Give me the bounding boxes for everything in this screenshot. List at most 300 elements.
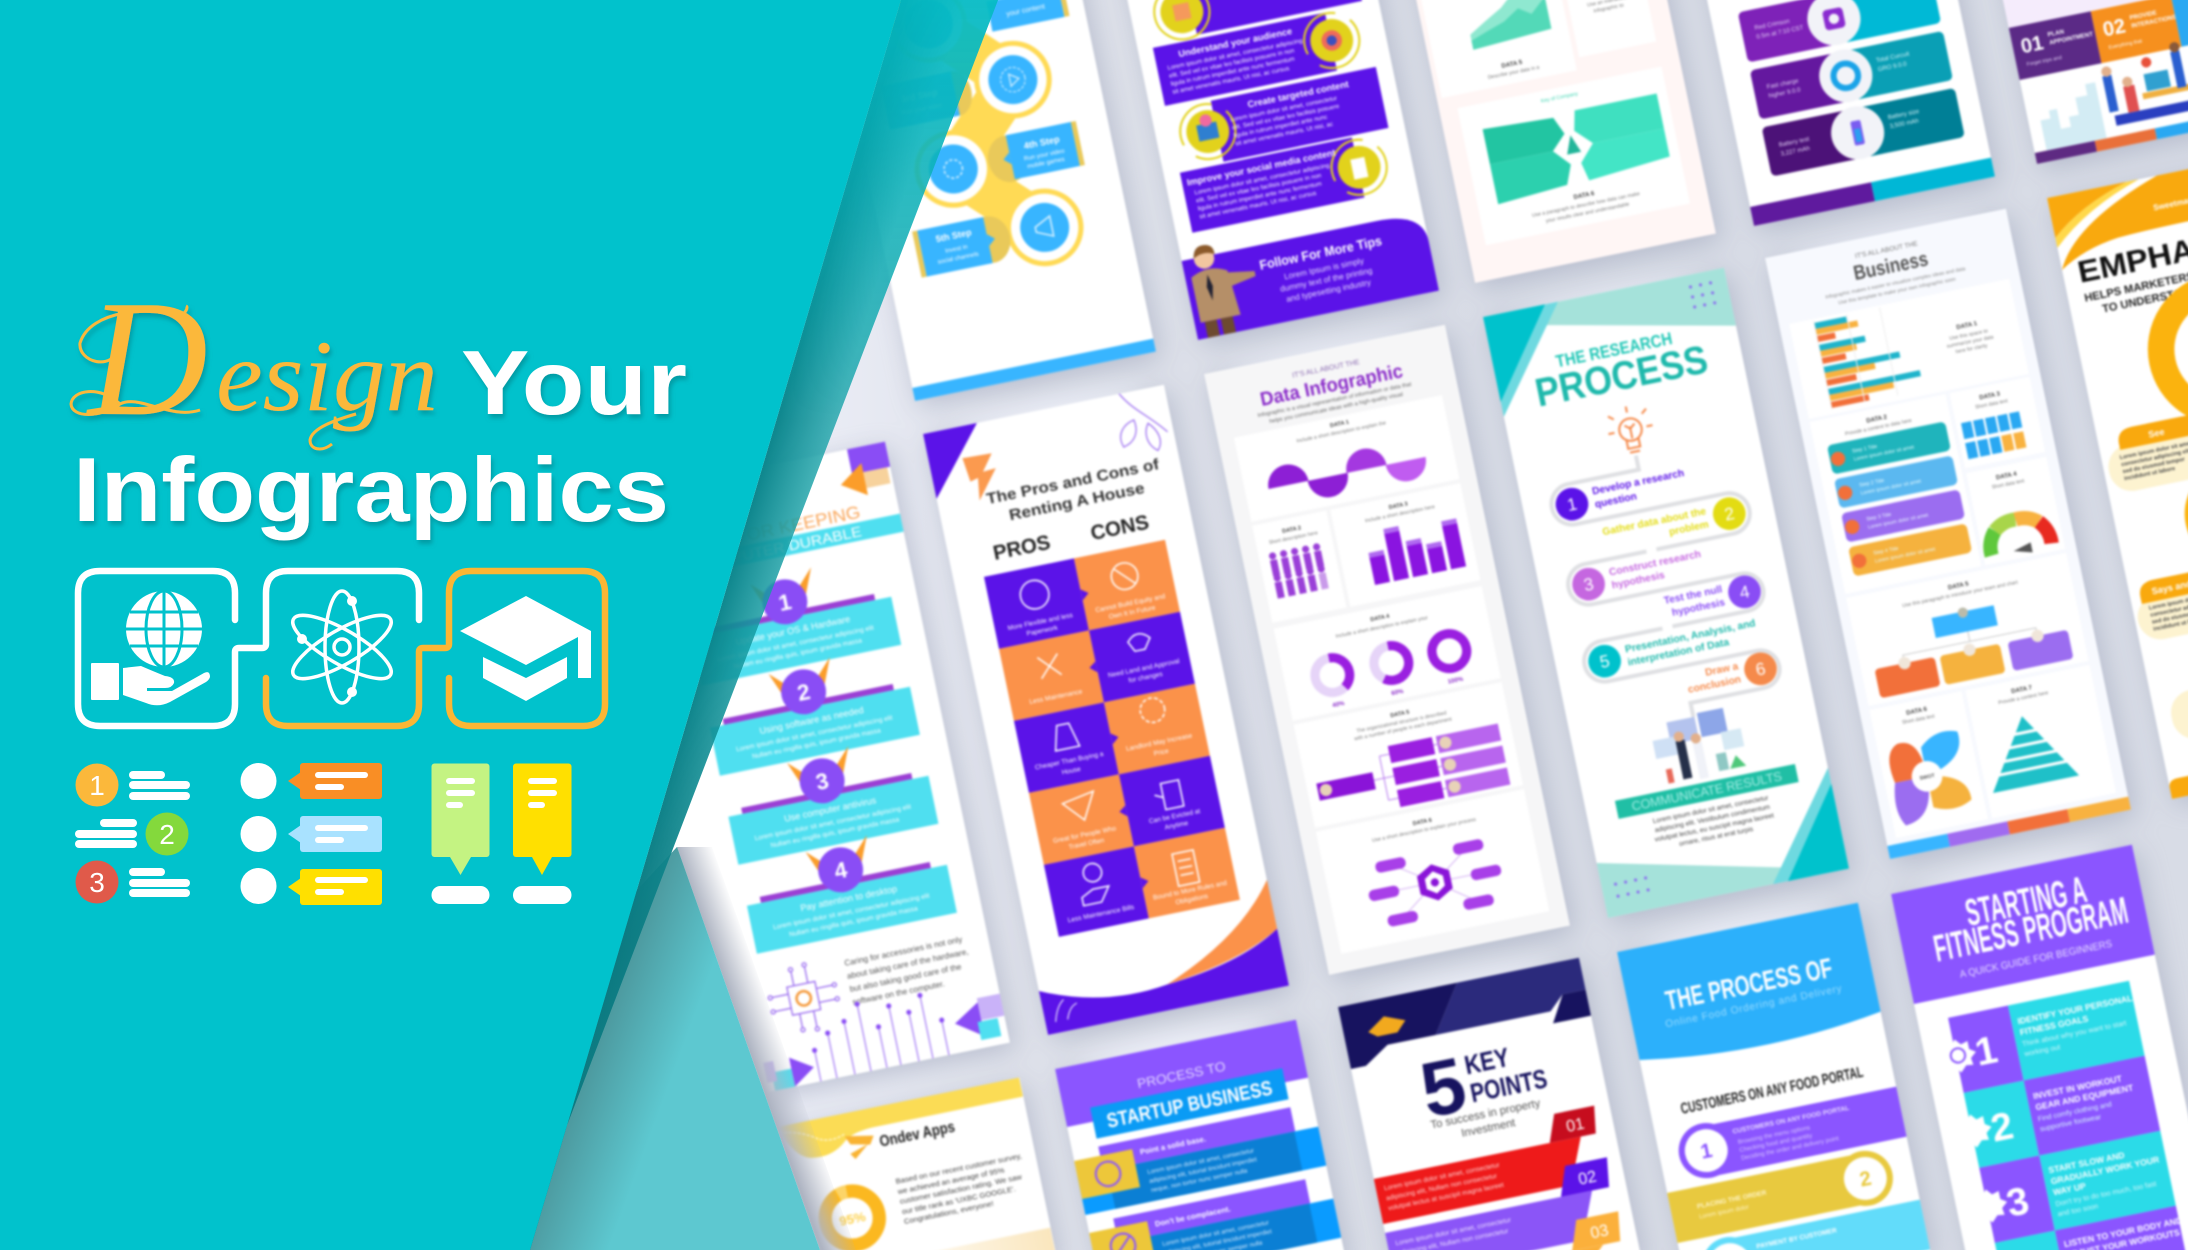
header [1338, 958, 1592, 1069]
block 01: 01 [2019, 32, 2046, 58]
panel: data 4 donuts: 60% [1391, 688, 1405, 697]
step 2: Lorem ipsum dolor [1699, 1204, 1750, 1221]
panel: data 2 cards: Step 3 Title [1866, 512, 1892, 523]
panel: bar chart [1789, 279, 2029, 419]
logo [845, 1134, 875, 1160]
step 1: Nullam eu ringilla quis, ipsum gravida massa [733, 637, 863, 671]
step 5 [1585, 614, 1760, 680]
pros and cons grid: Anytime [1164, 820, 1189, 832]
collage of tilted infographic cards [574, 0, 2188, 1250]
paragraph [1650, 794, 1777, 853]
card: process to startup business [1055, 1020, 1345, 1250]
step 5: 5 [1598, 651, 1611, 672]
pros and cons grid: Travel Often [1068, 837, 1105, 851]
panel: data 2 cards: Lorem ipsum dolor sit amet [1860, 478, 1922, 497]
step 4: Lorem ipsum dolor sit amet, consectetur adipiscing elit [773, 892, 930, 931]
heading: key points [1462, 1035, 1550, 1108]
label: 4th step: mobile games [1027, 156, 1065, 170]
step 1 [1553, 465, 1689, 523]
connecting yellow shape [923, 9, 1045, 243]
panel: data 5 org tree: DATA 5 [1390, 710, 1410, 719]
step 1: Develop a research [1591, 468, 1685, 498]
grid: step rows [1933, 980, 2188, 1250]
pros and cons grid: Need Land and Approval [1107, 658, 1181, 679]
step 3: Use computer antivirus [783, 795, 877, 824]
item: point a solid base: adipiscing elit, tutorial tincidunt imperdiet [1149, 1156, 1258, 1185]
header: PROCESS TO [1136, 1059, 1227, 1091]
grid: step rows: LISTEN TO YOUR BODY AND [2063, 1215, 2183, 1249]
step 2: problem [1668, 519, 1710, 538]
title line 1: STARTING A [1962, 869, 2090, 935]
card: ondev apps [778, 1078, 1056, 1250]
panel: data 6 hub: DATA 6 [1412, 818, 1432, 827]
step 3: Lorem ipsum dolor sit amet, consectetur adipiscing elit [754, 803, 912, 842]
section: see: sed do eiusmod tempor [2122, 457, 2186, 475]
card: business data [1765, 209, 2131, 859]
step 1: Checking food and quantity [1739, 1132, 1814, 1154]
donut: 95% [820, 1186, 884, 1250]
title: IT'S ALL ABOUT THE [1292, 358, 1361, 380]
label: 5th step [912, 213, 1015, 278]
ribbon 01: Lorem ipsum dolor sit amet, consectetur [1383, 1162, 1501, 1192]
step 3: Nullam eu ringilla quis, ipsum gravida massa [770, 816, 900, 850]
top yellow band and swoosh [778, 1078, 1027, 1164]
pros and cons grid: Cannot Build Equity and [1095, 593, 1166, 614]
heading band: computer durable [732, 512, 905, 568]
light glow patches in the row gaps [949, 216, 2115, 1082]
step 2: Lorem ipsum dolor sit amet, consectetur adipiscing elit [736, 714, 893, 753]
row 2: higher 9.0.0 [1768, 86, 1802, 100]
pros and cons grid: Can be Evicted at [1148, 808, 1201, 825]
block 02: INTERACTIONS [2131, 14, 2177, 30]
pros and cons grid: Paperwork [1026, 624, 1059, 638]
title: Infographic is a visual representation of information or data that [1257, 382, 1412, 419]
panel: data 3 bars: DATA 3 [1388, 501, 1408, 511]
row 3: Battery size [1887, 108, 1920, 121]
row 2 [1749, 29, 1953, 120]
panel: data 2 people [1252, 511, 1346, 623]
blue circle 4 [999, 182, 1091, 273]
panel: petals: DATA 6 [1906, 706, 1928, 717]
panel: data 1 semicircles [1234, 395, 1459, 522]
step 2 [710, 657, 922, 777]
grid: step rows: INVEST IN WORKOUT [2032, 1073, 2123, 1101]
item: create targeted content [1175, 67, 1388, 169]
text: caring for accessories: but also taking good care of the [849, 962, 963, 994]
paragraph: Congratulations, everyone! [903, 1199, 994, 1226]
green callout [432, 764, 490, 904]
grid: step rows: START SLOW AND [2048, 1150, 2125, 1175]
row 3 [1761, 86, 1965, 177]
panel: data 5 org tree [1294, 682, 1523, 828]
panel: data 6 hub: Use a short description to explain your process [1372, 817, 1477, 844]
speech bubble list icon [240, 763, 382, 905]
grid: step rows: WAY UP [2052, 1181, 2087, 1197]
block 02 [2091, 0, 2182, 63]
lower light teal wedge [500, 847, 820, 1250]
step 1: 1 [1699, 1140, 1714, 1164]
panel: pyramid: Provide a context here [1998, 690, 2049, 706]
step 4: Nullam eu ringilla quis, ipsum gravida massa [789, 905, 919, 939]
card: pink data panels [1350, 0, 1716, 283]
item: create targeted content: Create targeted content [1247, 79, 1350, 110]
card drop shadows [650, 0, 2188, 1250]
step 6 [1683, 650, 1780, 700]
label: 3rd step: Run your video [901, 102, 944, 117]
subtitle [1430, 1097, 1545, 1146]
tall callout icons [432, 764, 572, 904]
item: create targeted content: elit. Sed vel ex vitae leo facilisis posuere [1231, 103, 1341, 132]
bubble row 3 [240, 868, 382, 905]
icon: hand holding globe [91, 590, 210, 705]
decoration: bottom corner shapes [759, 994, 1010, 1092]
item: create targeted content: sit amet venenatis mauris. Ut nisi, ac [1235, 121, 1334, 148]
pros and cons grid: Landlord May Increase [1126, 732, 1193, 753]
card: social media tips [1073, 0, 1439, 340]
section: says and does [2130, 547, 2188, 643]
ribbon 03: 03 [1589, 1221, 1610, 1243]
panel: data 1 semicircles: DATA 1 [1330, 420, 1350, 429]
grid: step rows: working out [2023, 1043, 2061, 1058]
top mint band [1541, 268, 1736, 363]
item: top block [1148, 0, 1362, 44]
paragraph: Based on our recent customer survey, [895, 1151, 1023, 1186]
blue header [1617, 903, 1883, 1070]
panel: data 2 cards: Lorem ipsum dolor sit amet [1874, 546, 1936, 565]
text: caring for accessories: about taking care of the hardware, [846, 947, 969, 981]
grid: step rows: and too soon [2057, 1202, 2099, 1218]
title [1250, 349, 1414, 427]
item: point a solid base: neque, non tortor nunc semper nulla [1150, 1167, 1249, 1194]
step 3 [1697, 1198, 1931, 1250]
panel: data side text [1553, 0, 1656, 57]
row 1 [1738, 0, 1941, 63]
panel: data 6 arrows: DATA 6 [1573, 190, 1596, 201]
label: top step [986, 0, 1069, 32]
item: understand your audience: elit. Sed vel ex vitae leo facilisis posuere in non [1169, 47, 1295, 80]
header [1055, 1020, 1308, 1127]
panel: data 3 bars [1330, 483, 1480, 607]
pros and cons grid [984, 540, 1240, 937]
main teal panel [0, 0, 901, 1250]
connected icon frames [78, 571, 605, 726]
paragraph [894, 1154, 1023, 1225]
snake outline 5-6 [1580, 607, 1786, 736]
pros and cons grid: Price [1153, 748, 1170, 758]
grid: step rows: 2 [1987, 1104, 2017, 1151]
panel: data 3 bars: Include a short description here [1365, 504, 1436, 524]
text: caring for accessories: software on the computer. [852, 979, 945, 1007]
decoration: circuit lines [810, 992, 951, 1082]
ribbon 03 [1390, 1211, 1628, 1250]
ribbon 01: adipiscing elit, Nullam non consectetur [1386, 1173, 1498, 1202]
blue circle 2 [967, 34, 1059, 125]
step 4 [1662, 573, 1764, 624]
heading band: computer durable: COMPUTER DURABLE [695, 524, 863, 574]
card: plan and strategy [1912, 0, 2188, 164]
panel: data 5 area chart [1413, 0, 1577, 98]
title [985, 456, 1166, 528]
panel: pyramid [1965, 665, 2116, 818]
item: understand your audience: sit amet venenatis mauris. Ut nisi, ac cursus [1172, 65, 1290, 96]
item: understand your audience: Lorem ipsum dolor sit amet, consectetur adipiscing [1167, 37, 1303, 72]
card: the research process [1483, 268, 1849, 918]
pros and cons grid: Less Maintenance Bills [1067, 904, 1136, 924]
item: don't be complacent: Don't be complacent. [1154, 1204, 1231, 1229]
panel: bar chart: DATA 1 [1956, 320, 1978, 331]
panel: data side text: infographic to [1593, 2, 1624, 15]
grid: step rows: supportive footwear [2039, 1113, 2102, 1133]
pros and cons grid: Bound to More Rules and [1153, 880, 1228, 902]
label: 3rd step: 3rd Step [900, 87, 939, 104]
ribbon 01 [1368, 1106, 1609, 1224]
text: caring for accessories [844, 934, 975, 1007]
step 1 [699, 567, 902, 683]
step 1: question [1594, 491, 1638, 511]
illustration: city skyline [2035, 82, 2107, 151]
panel: petals: Short data text [1902, 713, 1936, 726]
paragraph: our title rank as 'UXBC GOOGLE'. [901, 1184, 1016, 1216]
block 01: PLAN [2047, 28, 2065, 39]
footer: follow for more tips: Follow For More Tips [1258, 233, 1383, 273]
grid: step rows: FITNESS GOALS [2019, 1013, 2089, 1037]
title: helps you communicate ideas with a high-quality visual [1269, 392, 1404, 425]
headline word: design: esign [216, 320, 438, 433]
panel: data 2 cards: Step 1 Title [1852, 444, 1878, 455]
item: improve your social media content: Improve your social media content [1186, 147, 1336, 188]
panel: bar chart: here for clarity [1955, 343, 1988, 355]
panel: data 6 hub [1316, 789, 1549, 954]
grid: step rows: GRADUALLY WORK YOUR [2050, 1154, 2161, 1186]
grid: step rows: 1 [1971, 1028, 2001, 1075]
panel: data 4 donuts: 100% [1447, 676, 1464, 686]
panel: data 6 arrows [1457, 66, 1690, 245]
big number 5: 5 [1414, 1042, 1473, 1135]
footer: follow for more tips: and typesetting industry [1285, 278, 1373, 304]
item 3: 3 [89, 867, 105, 898]
label: top step: your content [1006, 2, 1046, 18]
card: 5 key points [1338, 958, 1641, 1250]
panel: data 2 cards: Provide a context to data here [1845, 418, 1913, 437]
row 3: 3,500 mAh [1889, 117, 1919, 130]
footer: follow for more tips [1182, 212, 1439, 340]
column headings [991, 512, 1151, 565]
label: 4th step [984, 121, 1085, 186]
block 03 [2171, 0, 2188, 47]
panel: petals: SWOT [1919, 773, 1936, 782]
step 3: hypothesis [1611, 570, 1666, 592]
step 3 [1569, 545, 1706, 603]
block 01 [2009, 11, 2102, 80]
block 02: Everything that [2108, 38, 2143, 51]
translucent darker teal strip [530, 0, 998, 1250]
step 1: Update your OS & Hardware [735, 614, 851, 647]
label: 5th step: 5th Step [935, 227, 973, 244]
illustration: team at work [2098, 36, 2188, 127]
subtitle: Investment [1460, 1117, 1517, 1140]
step 4: Pay attention to desktop [799, 884, 898, 913]
row 1: 0.5m at 7:10 CST [1756, 24, 1804, 41]
bottom teal triangles [1752, 768, 1849, 884]
panel: pyramid: DATA 7 [2011, 684, 2033, 695]
item: improve your social media content: Lorem ipsum dolor sit amet, consectetur adipiscing [1194, 162, 1330, 197]
band: communicate results [1615, 764, 1799, 819]
yellow callout [513, 764, 572, 904]
card: the process of online food ordering [1617, 903, 1931, 1250]
band: communicate results: COMMUNICATE RESULTS [1630, 768, 1783, 814]
pros and cons grid: for changes [1128, 671, 1164, 685]
ribbon 02: Lorem ipsum dolor sit amet, consectetur [1395, 1217, 1512, 1247]
bubble row 2 [240, 816, 382, 852]
step 2 [1667, 1146, 1898, 1245]
step 1: 1 [1565, 494, 1579, 515]
grid: step rows: Find comfy clothing and [2037, 1100, 2113, 1123]
step 5: Presentation, Analysis, and [1624, 618, 1757, 656]
bottom strip [1750, 158, 1995, 226]
grid: step rows: IDENTIFY YOUR PERSONAL [2017, 993, 2134, 1026]
panel: data 3 cups [1950, 377, 2045, 468]
grid: step rows: GEAR AND EQUIPMENT [2034, 1082, 2135, 1112]
text: caring for accessories: Caring for accessories is not only [844, 935, 964, 968]
step 6: Draw a [1704, 661, 1740, 679]
man presenting [1185, 236, 1266, 339]
heading: key points: POINTS [1468, 1063, 1550, 1108]
decoration: leaf outline [1111, 384, 1171, 457]
snake outline 3-4 [1564, 530, 1767, 645]
ribbon 01: volutpat lectus at suscipit magna laoreet [1388, 1182, 1505, 1212]
section heading: CUSTOMERS ON ANY FOOD PORTAL [1679, 1064, 1865, 1118]
headline word: design [71, 266, 438, 450]
icon: light bulb [1604, 402, 1657, 456]
step 1: Lorem ipsum dolor sit amet, consectetur adipiscing elit [717, 624, 875, 663]
ribbon 02 [1379, 1157, 1623, 1250]
label: 3rd step [881, 68, 976, 130]
bottom mint band [1597, 825, 1795, 918]
ribbon 01: 01 [1565, 1115, 1586, 1136]
card: emphathy map [2047, 149, 2188, 799]
header [1891, 845, 2155, 1004]
dots bottom [1614, 876, 1650, 898]
footer gradient band [940, 1226, 1056, 1250]
step 3: PAYMENT BY CUSTOMER [1756, 1227, 1838, 1250]
step 2: PLACING THE ORDER [1696, 1190, 1767, 1211]
panel: data 1 semicircles: Include a short description to explain the [1296, 420, 1387, 445]
step 2: 2 [1858, 1168, 1873, 1191]
snake outline 1-2 [1545, 436, 1753, 568]
top teal triangles [1483, 302, 1579, 417]
title: Use this template to make your own infographic soon [1838, 276, 1956, 306]
step 2 [1601, 494, 1749, 555]
section: cream note [2167, 660, 2188, 743]
row 2: GRO 9.0.0 [1877, 60, 1908, 73]
label: 5th step: social channels [937, 251, 979, 266]
row 2: Fast charge [1766, 77, 1800, 91]
bottom colour bar [1887, 797, 2131, 859]
step 3: Construct research [1608, 549, 1702, 579]
item: create targeted content: Lorem ipsum dolor sit amet, consectetur [1230, 95, 1338, 124]
card: tips for keeping computer durable [672, 440, 1010, 1091]
corner purple triangle [923, 423, 991, 499]
column headings: PROS [991, 532, 1052, 565]
step 6: conclusion [1687, 674, 1742, 696]
panel: data 2 cards: DATA 2 [1866, 414, 1888, 425]
step 3: 3 [1582, 574, 1595, 595]
panel: org chart: Use this paragraph to introduce your team and chart [1902, 580, 2019, 609]
decoration: top right shapes [840, 440, 892, 496]
step 2: Using software as needed [759, 705, 865, 736]
headline word: your: Your [461, 333, 687, 434]
dots [1689, 281, 1716, 309]
panel: data 2 cards: Step 4 Title [1873, 546, 1899, 557]
card: the pros and cons of renting a house [923, 383, 1289, 1035]
heading: key points: KEY [1462, 1042, 1512, 1080]
step 1: CUSTOMERS ON ANY FOOD PORTAL [1732, 1105, 1850, 1136]
pros and cons grid: Obligations [1175, 893, 1210, 906]
panel: data 2 cards: Lorem ipsum dolor sit amet [1853, 444, 1915, 463]
illustration: business people and screens [1649, 705, 1749, 787]
paragraph: volutpat lectus, eu suscipit magna laoreet [1654, 812, 1775, 844]
block 01: APPOINTMENT [2049, 31, 2094, 47]
item: improve your social media content: sit amet venenatis mauris. Ut nisi, ac cursus [1199, 190, 1317, 221]
panel: data 6 arrows: Use a paragraph to describe how data can make [1532, 191, 1641, 219]
panel: data 4 gauge: Short data text [1991, 478, 2026, 491]
panel: bar chart: Use this space to [1949, 328, 1989, 342]
footer: follow for more tips: Lorem Ipsum is simply [1283, 256, 1366, 281]
footer: follow for more tips: dummy text of the printing [1279, 266, 1374, 294]
panel: data 5 area chart: DATA 5 [1501, 59, 1523, 70]
section: see [2101, 396, 2188, 495]
panel: petals [1869, 691, 1988, 838]
logo orange [962, 452, 1002, 502]
item 2: 2 [159, 819, 175, 850]
item: point a solid base [1072, 1103, 1326, 1215]
row 3: Battery test [1778, 136, 1810, 149]
band: startup business: STARTUP BUSINESS [1105, 1077, 1274, 1133]
section: see: See [2147, 427, 2165, 440]
label: 4th step: 4th Step [1023, 134, 1061, 151]
item: improve your social media content: elit. Sed vel ex vitae leo facilisis posuere in non [1196, 172, 1322, 205]
wave footer [1026, 880, 1289, 1035]
step 2: Nullam eu ringilla quis, ipsum gravida massa [752, 727, 882, 761]
item: don't be complacent [1087, 1175, 1341, 1250]
paragraph: ornare, risus at erat turpis [1679, 826, 1755, 848]
item: understand your audience: ligula in rutrum imperdiet ante nunc fermentum [1170, 56, 1295, 88]
title: Infographic makes it easier to visualize complex ideas and data [1825, 266, 1966, 301]
title: Business [1852, 248, 1930, 285]
pros and cons grid: More Flexible and less [1007, 612, 1074, 632]
pros and cons grid: Cheaper Than Buying a [1034, 751, 1104, 772]
subtitle: A QUICK GUIDE FOR BEGINNERS [1959, 939, 2113, 981]
item: improve your social media content [1180, 132, 1392, 233]
blue circle 3 [907, 123, 999, 215]
panel: data 2 cards [1810, 394, 1981, 594]
title: the research: THE RESEARCH [1554, 328, 1674, 371]
title: IT'S ALL ABOUT THE [1855, 240, 1919, 260]
step 1 [1674, 1084, 1907, 1183]
ribbon 02: 02 [1577, 1167, 1598, 1189]
headline word: infographics: Infographics [73, 440, 669, 541]
panel: data 3 cups: Short data text [1975, 398, 2009, 411]
step 2: 2 [795, 679, 812, 706]
step 1: 1 [776, 589, 794, 616]
panel: data 5 org tree: The organizational structure is described [1356, 710, 1447, 735]
bottom blue bar [912, 339, 1156, 401]
title: Renting A House [1008, 480, 1146, 524]
step 6: 6 [1754, 658, 1767, 680]
item: create targeted content: ligula in rutrum imperdiet ante nunc [1233, 114, 1328, 140]
frame line gold [266, 571, 605, 726]
grid: step rows: 3 [2003, 1179, 2033, 1226]
